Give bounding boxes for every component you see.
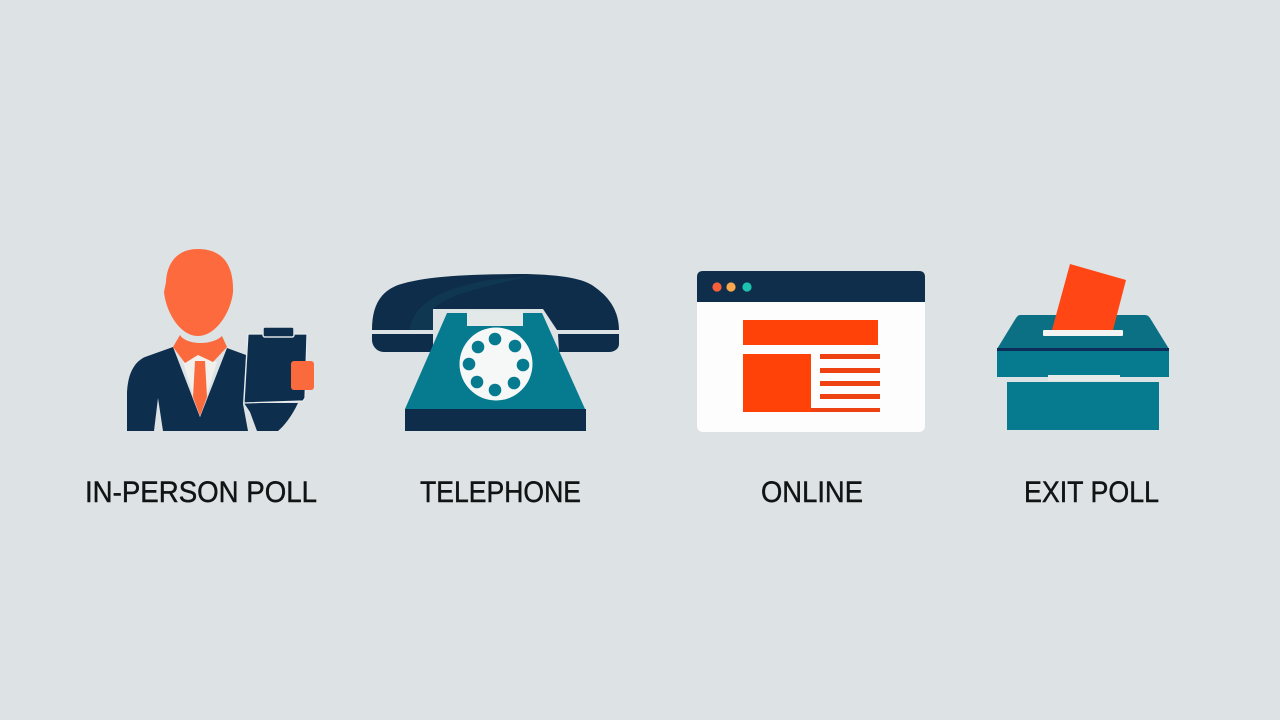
- cradle: [467, 311, 523, 326]
- head: [164, 249, 233, 336]
- left earpiece: [372, 334, 433, 352]
- rotary dial: [460, 328, 532, 400]
- lower box: [1007, 382, 1159, 430]
- right earpiece: [558, 334, 619, 352]
- suit gap: [154, 398, 163, 431]
- phone body: [405, 313, 585, 409]
- icon: ballot box: [997, 264, 1169, 430]
- handset highlight: [410, 276, 530, 330]
- handset: [372, 274, 619, 330]
- ballot paper: [1052, 264, 1126, 330]
- clipboard: [244, 334, 307, 403]
- icon: browser window: [697, 271, 925, 432]
- label: in-person poll: IN-PERSON POLL: [85, 476, 317, 509]
- window buttons: [712, 282, 752, 292]
- panel: exit poll: [997, 264, 1169, 509]
- icon: person with clipboard: [127, 249, 314, 431]
- text lines: [811, 354, 880, 412]
- title bar: [697, 271, 925, 302]
- thumb: [291, 361, 314, 390]
- page banner: [743, 320, 878, 345]
- suit: [127, 347, 248, 431]
- window body: [697, 271, 925, 432]
- panel: telephone: [372, 274, 619, 509]
- lid top: [997, 315, 1169, 349]
- light strip: [1048, 375, 1120, 381]
- shirt: [183, 355, 217, 417]
- lid front: [997, 351, 1169, 377]
- slot: [1043, 330, 1123, 336]
- icon: rotary telephone: [372, 274, 619, 431]
- phone base: [405, 409, 586, 431]
- hand below clipboard: [244, 403, 298, 431]
- collar: [173, 335, 227, 363]
- panel: online: [697, 271, 925, 509]
- page image: [743, 354, 811, 412]
- lid edge: [997, 348, 1169, 351]
- clipboard clip: [263, 327, 294, 337]
- label: online: ONLINE: [761, 476, 863, 509]
- label: telephone: TELEPHONE: [420, 476, 581, 509]
- tie: [193, 361, 207, 416]
- panel: in-person poll: [85, 249, 317, 509]
- label: exit poll: EXIT POLL: [1024, 476, 1159, 509]
